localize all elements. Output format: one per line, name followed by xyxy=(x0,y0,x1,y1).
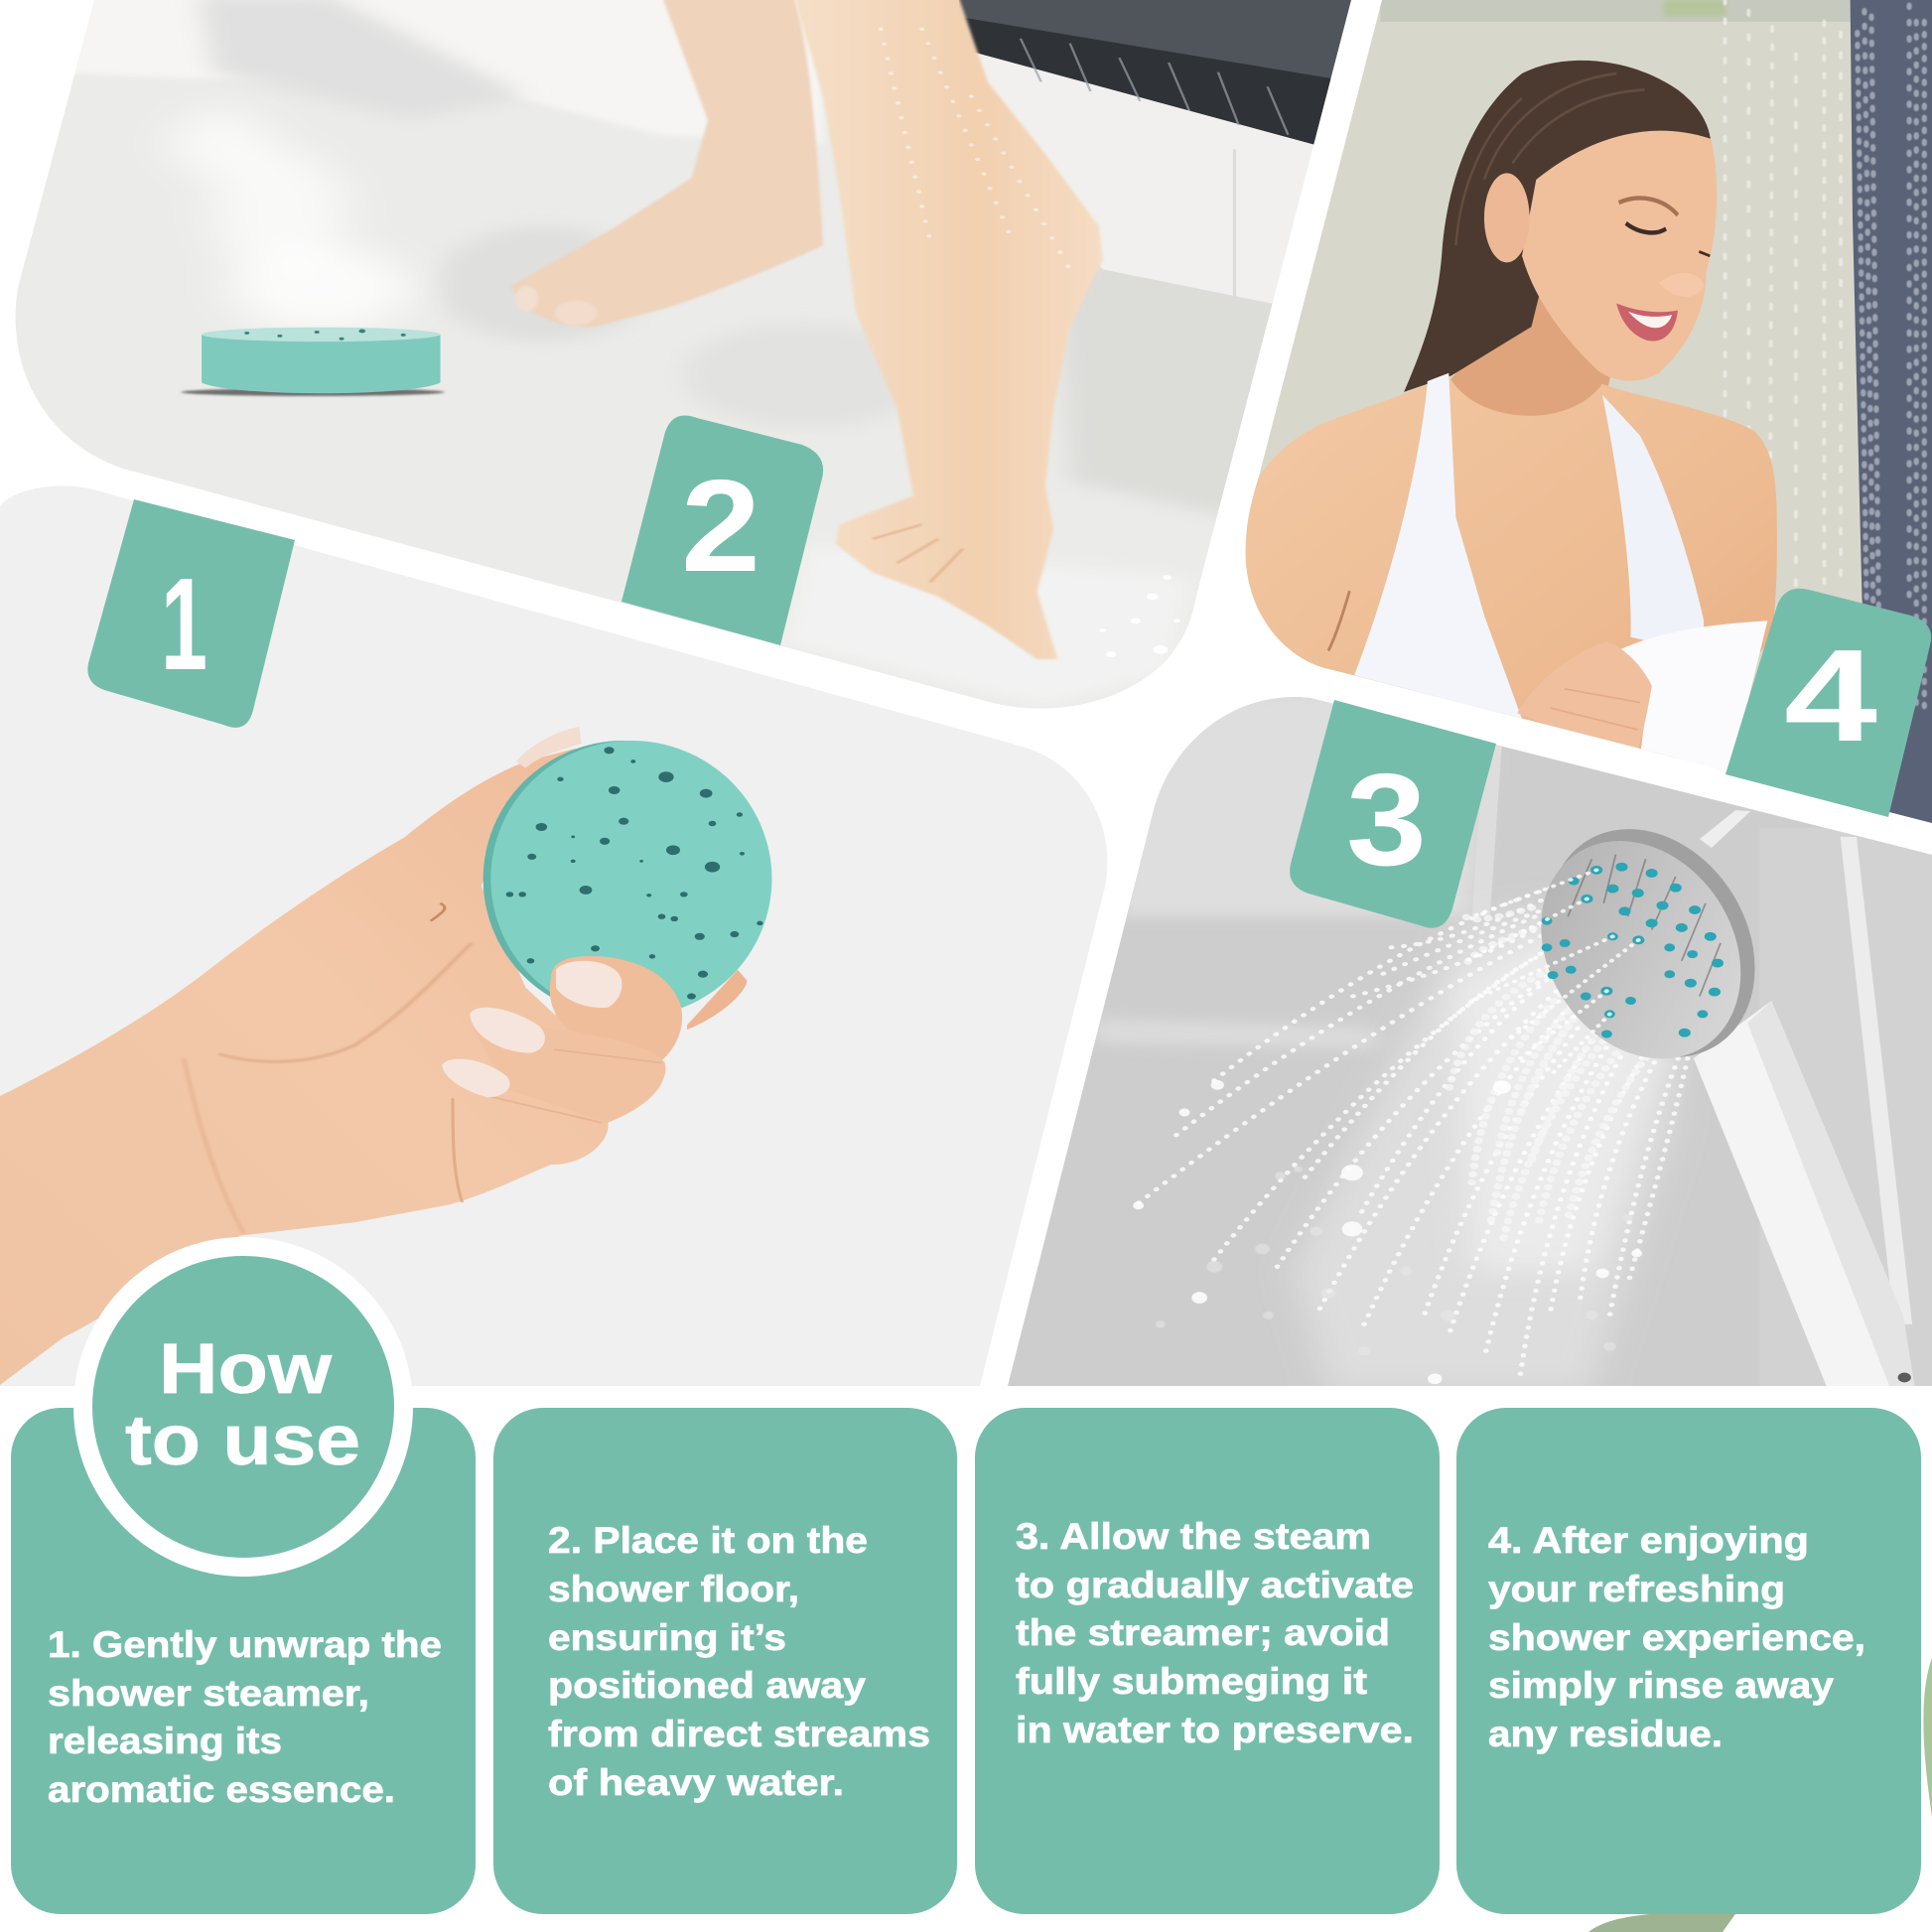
splash on floor xyxy=(800,555,1180,696)
number tag 4: 4 xyxy=(1784,622,1877,768)
card 2 xyxy=(493,1408,957,1914)
illustration: hand xyxy=(0,727,748,1385)
tablet on floor xyxy=(181,328,445,396)
card 1 xyxy=(11,1408,476,1914)
step 1 text: 1. Gently unwrap the xyxy=(48,1624,442,1665)
step 4 text: simply rinse away xyxy=(1488,1665,1834,1706)
ear xyxy=(1484,173,1530,262)
number tag 4 xyxy=(1725,589,1931,817)
hair xyxy=(1404,61,1711,392)
step 3 text: 3. Allow the steam xyxy=(1016,1516,1371,1557)
shower handle xyxy=(1694,1001,1915,1391)
number tag 2: 2 xyxy=(681,453,760,599)
panel: step 1 hand holding tablet xyxy=(0,477,1122,1390)
shoulders and chest xyxy=(1245,375,1777,759)
card 4 xyxy=(1456,1408,1921,1914)
neck xyxy=(1450,296,1610,416)
title badge: How to use: How xyxy=(159,1330,333,1409)
illustration: fingers over tablet xyxy=(442,956,682,1123)
towel and hand xyxy=(1517,621,1767,776)
panel: step 2 feet on shower floor xyxy=(0,0,1366,715)
step 4 text: 4. After enjoying xyxy=(1488,1520,1809,1561)
shower wall background xyxy=(50,0,1350,529)
facial features xyxy=(1616,199,1710,342)
step 4 text: your refreshing xyxy=(1488,1569,1785,1609)
panel: step 3 shower head xyxy=(993,685,1932,1395)
step 4 text: any residue. xyxy=(1488,1714,1723,1754)
step 3 text: the streamer; avoid xyxy=(1016,1612,1390,1653)
step 4 text: shower experience, xyxy=(1488,1617,1865,1658)
decorative leaf bottom xyxy=(1588,1911,1737,1932)
step 1 text xyxy=(48,1624,442,1810)
step 2 text: of heavy water. xyxy=(548,1762,844,1803)
step 3 text xyxy=(1016,1516,1414,1750)
number tag 2 xyxy=(621,415,823,645)
step 1 text: aromatic essence. xyxy=(48,1769,395,1810)
hair strands on forehead xyxy=(1455,73,1645,245)
step 1 text: shower steamer, xyxy=(48,1673,369,1714)
number tag 1: 1 xyxy=(161,551,207,697)
number tag 3 xyxy=(1290,700,1496,928)
title badge: How to use xyxy=(73,1237,413,1577)
water spray xyxy=(1133,881,1688,1391)
step 2 text: ensuring it’s xyxy=(548,1617,786,1658)
front leg and foot xyxy=(794,0,1103,659)
step 3 text: to gradually activate xyxy=(1016,1565,1414,1605)
step 1 text: releasing its xyxy=(48,1721,282,1761)
panel: step 4 woman with towel xyxy=(1231,0,1932,872)
step 3 text: in water to preserve. xyxy=(1016,1710,1414,1750)
title badge: How to use: to use xyxy=(125,1402,360,1480)
step 3 text: fully submeging it xyxy=(1016,1661,1367,1702)
back foot xyxy=(510,0,823,328)
step 4 text xyxy=(1488,1520,1865,1754)
step 2 text: positioned away xyxy=(548,1665,866,1706)
steam rising from tablet xyxy=(173,110,411,332)
wall background xyxy=(1095,691,1932,1395)
step 2 text xyxy=(548,1520,930,1803)
dark window frame xyxy=(959,0,1366,323)
shower head xyxy=(1471,829,1755,1074)
white halter top xyxy=(1354,373,1522,719)
step 2 text: from direct streams xyxy=(548,1714,930,1754)
face xyxy=(1522,131,1717,381)
illustration: speckled tablet xyxy=(483,741,771,1018)
step 2 text: 2. Place it on the xyxy=(548,1520,868,1561)
decorative leaf right xyxy=(1923,1658,1932,1817)
shower wall and curtain xyxy=(1380,0,1932,872)
card 3 xyxy=(975,1408,1440,1914)
number tag 3: 3 xyxy=(1346,747,1427,893)
number tag 1 xyxy=(87,499,295,728)
step 2 text: shower floor, xyxy=(548,1569,799,1609)
